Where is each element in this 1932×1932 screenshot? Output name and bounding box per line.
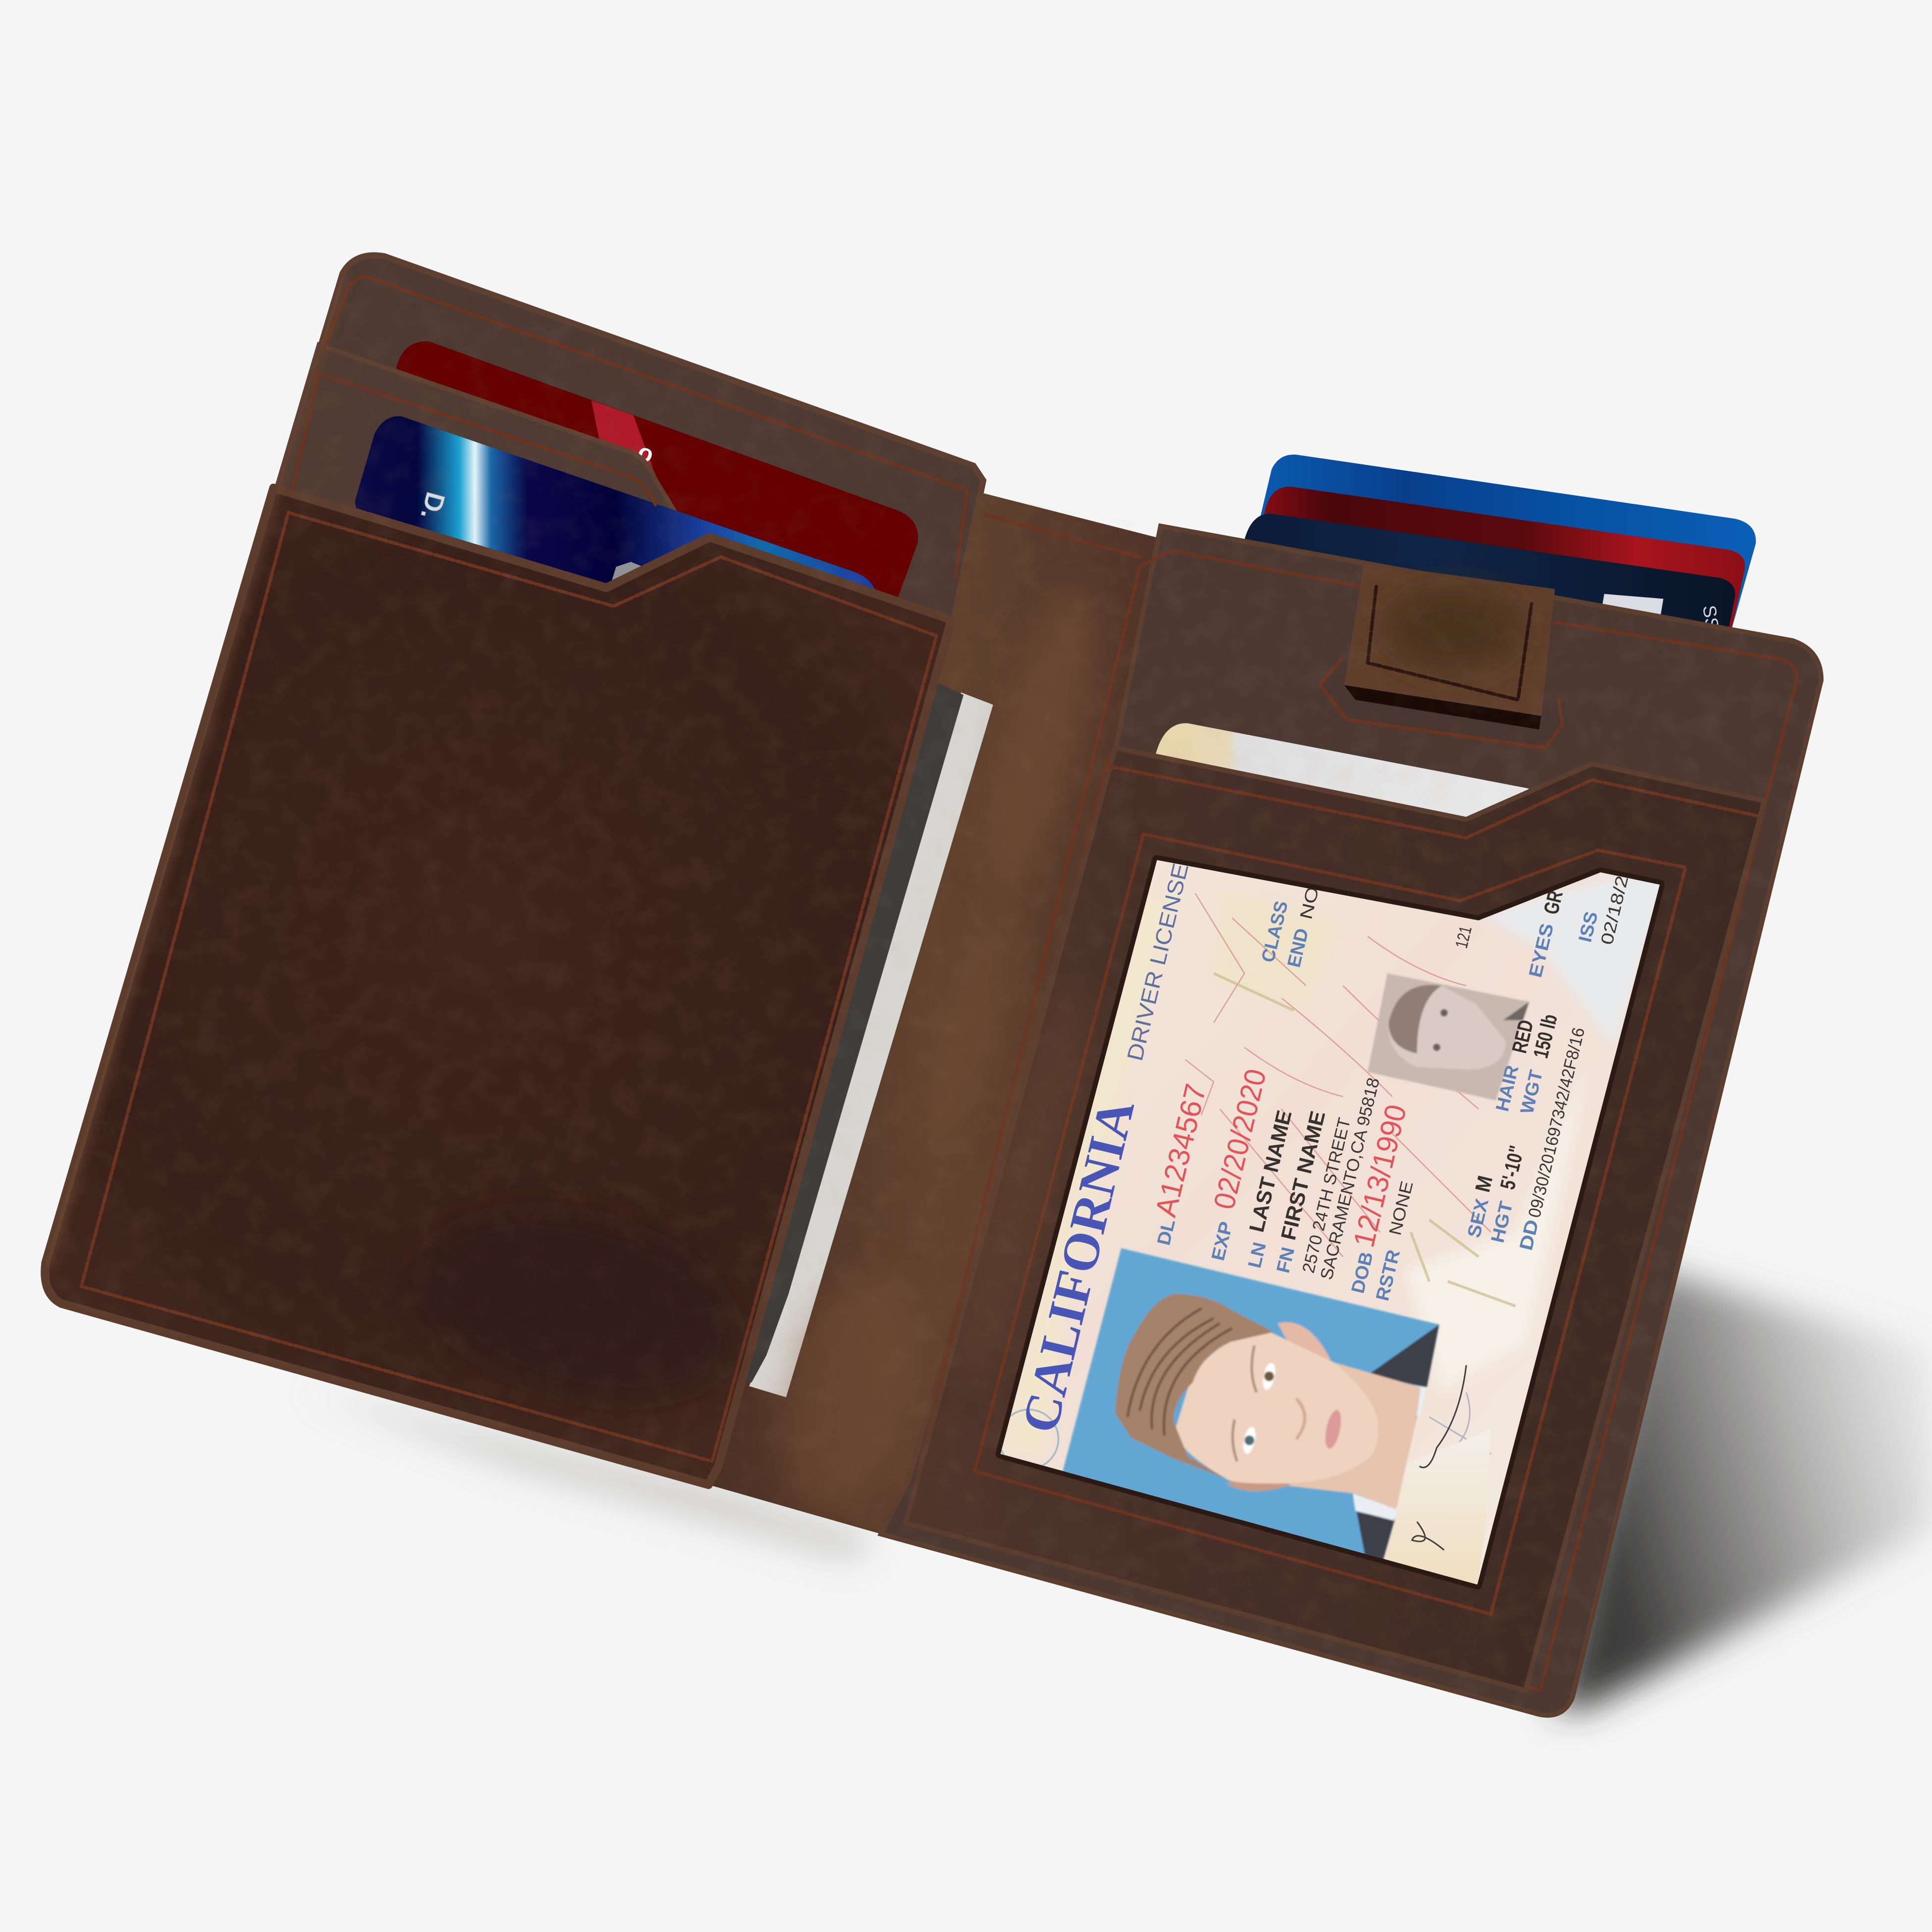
dark card: D — [1311, 554, 1338, 573]
window stitching — [974, 834, 1685, 1614]
license text: DRIVER LICENSE — [1122, 861, 1193, 1063]
license text: 12/13/1990 — [1347, 1101, 1413, 1250]
neck — [1269, 1363, 1421, 1509]
portrait photo — [1062, 1248, 1439, 1562]
brows — [1233, 1345, 1257, 1461]
red card — [1254, 487, 1745, 631]
blue card — [1254, 455, 1756, 631]
signature — [1412, 1365, 1466, 1550]
right back panel — [881, 526, 1821, 1715]
license text: DL — [1153, 1217, 1179, 1247]
face — [1174, 1327, 1378, 1483]
license text: 5'-10" — [1496, 1143, 1528, 1192]
license text: RSTR — [1372, 1248, 1404, 1303]
left pocket stitching — [81, 512, 936, 1461]
license text: DOB — [1347, 1250, 1377, 1295]
license text: 09/30/201697342/42F8/16 — [1525, 1025, 1588, 1220]
middle pocket — [259, 345, 675, 739]
shirt collar — [1363, 1377, 1427, 1417]
license text: NONE — [1385, 1179, 1417, 1237]
license text: A1234567 — [1149, 1080, 1213, 1220]
license text: DD — [1515, 1218, 1542, 1252]
license text: CALIFORNIA — [1011, 1094, 1145, 1438]
nose — [1296, 1398, 1305, 1439]
cards sticking out of the right panel — [1239, 455, 1756, 635]
right pocket stitching — [1109, 766, 1757, 838]
beige signature area — [1385, 1429, 1491, 1584]
leather mottling — [48, 276, 1714, 1617]
license text: M — [1471, 1173, 1497, 1194]
suit — [1368, 1324, 1439, 1387]
pull tab — [1320, 563, 1565, 748]
license text: HGT — [1487, 1199, 1517, 1245]
license base — [986, 838, 1676, 1596]
ears — [1278, 1322, 1331, 1360]
license text: CLASS — [1257, 899, 1292, 965]
license text: LAST NAME — [1245, 1108, 1296, 1234]
license text: 02/18/2 — [1597, 874, 1632, 947]
California driver license — [986, 838, 1676, 1596]
blue card in middle slot: D. — [415, 489, 452, 523]
license text: WGT — [1516, 1068, 1547, 1116]
spine — [709, 493, 1161, 1534]
license text: RED — [1508, 1017, 1538, 1056]
license text: END — [1283, 926, 1313, 969]
ID top peeking behind pocket — [1152, 723, 1529, 838]
upper left stitching — [293, 277, 967, 579]
license text: HAIR — [1491, 1063, 1523, 1114]
ID window frame — [1001, 860, 1660, 1584]
license text: EYES — [1525, 921, 1558, 979]
license text: 02/20/2020 — [1207, 1066, 1272, 1213]
license text: NO — [1296, 884, 1323, 921]
license text: GR — [1539, 888, 1567, 916]
license text: EXP — [1207, 1220, 1236, 1263]
left front pocket — [45, 488, 951, 1485]
license text: 121 — [1452, 924, 1475, 950]
license text: SACRAMENTO,CA 95818 — [1317, 1076, 1383, 1281]
license text: ISS — [1575, 910, 1602, 944]
wallet drop shadow — [302, 1269, 1932, 1713]
blue card in middle slot — [355, 416, 877, 616]
open leather wallet — [37, 247, 1836, 1725]
spine stitching — [918, 515, 1140, 1497]
dark card — [1239, 514, 1735, 635]
right front pocket — [906, 748, 1765, 1690]
red card in left slot — [370, 341, 918, 604]
ghost portrait — [1368, 973, 1529, 1100]
license text: FN — [1272, 1245, 1298, 1275]
lips — [1322, 1409, 1344, 1450]
license text: 2570 24TH STREET — [1299, 1116, 1354, 1275]
hair — [1115, 1294, 1274, 1478]
license text: FIRST NAME — [1276, 1109, 1329, 1242]
license text — [1011, 861, 1632, 1438]
right upper stitching — [906, 551, 1797, 1690]
license security pattern — [999, 863, 1676, 1509]
license text: 150 lb — [1529, 1012, 1562, 1061]
cash slot — [737, 680, 993, 1397]
license text: LN — [1244, 1240, 1270, 1270]
license text: SEX — [1463, 1197, 1492, 1240]
red card in left slot: o — [634, 437, 658, 468]
eyes — [1261, 1362, 1277, 1391]
dark card: SS — [1699, 604, 1723, 631]
left back panel — [45, 255, 983, 1485]
